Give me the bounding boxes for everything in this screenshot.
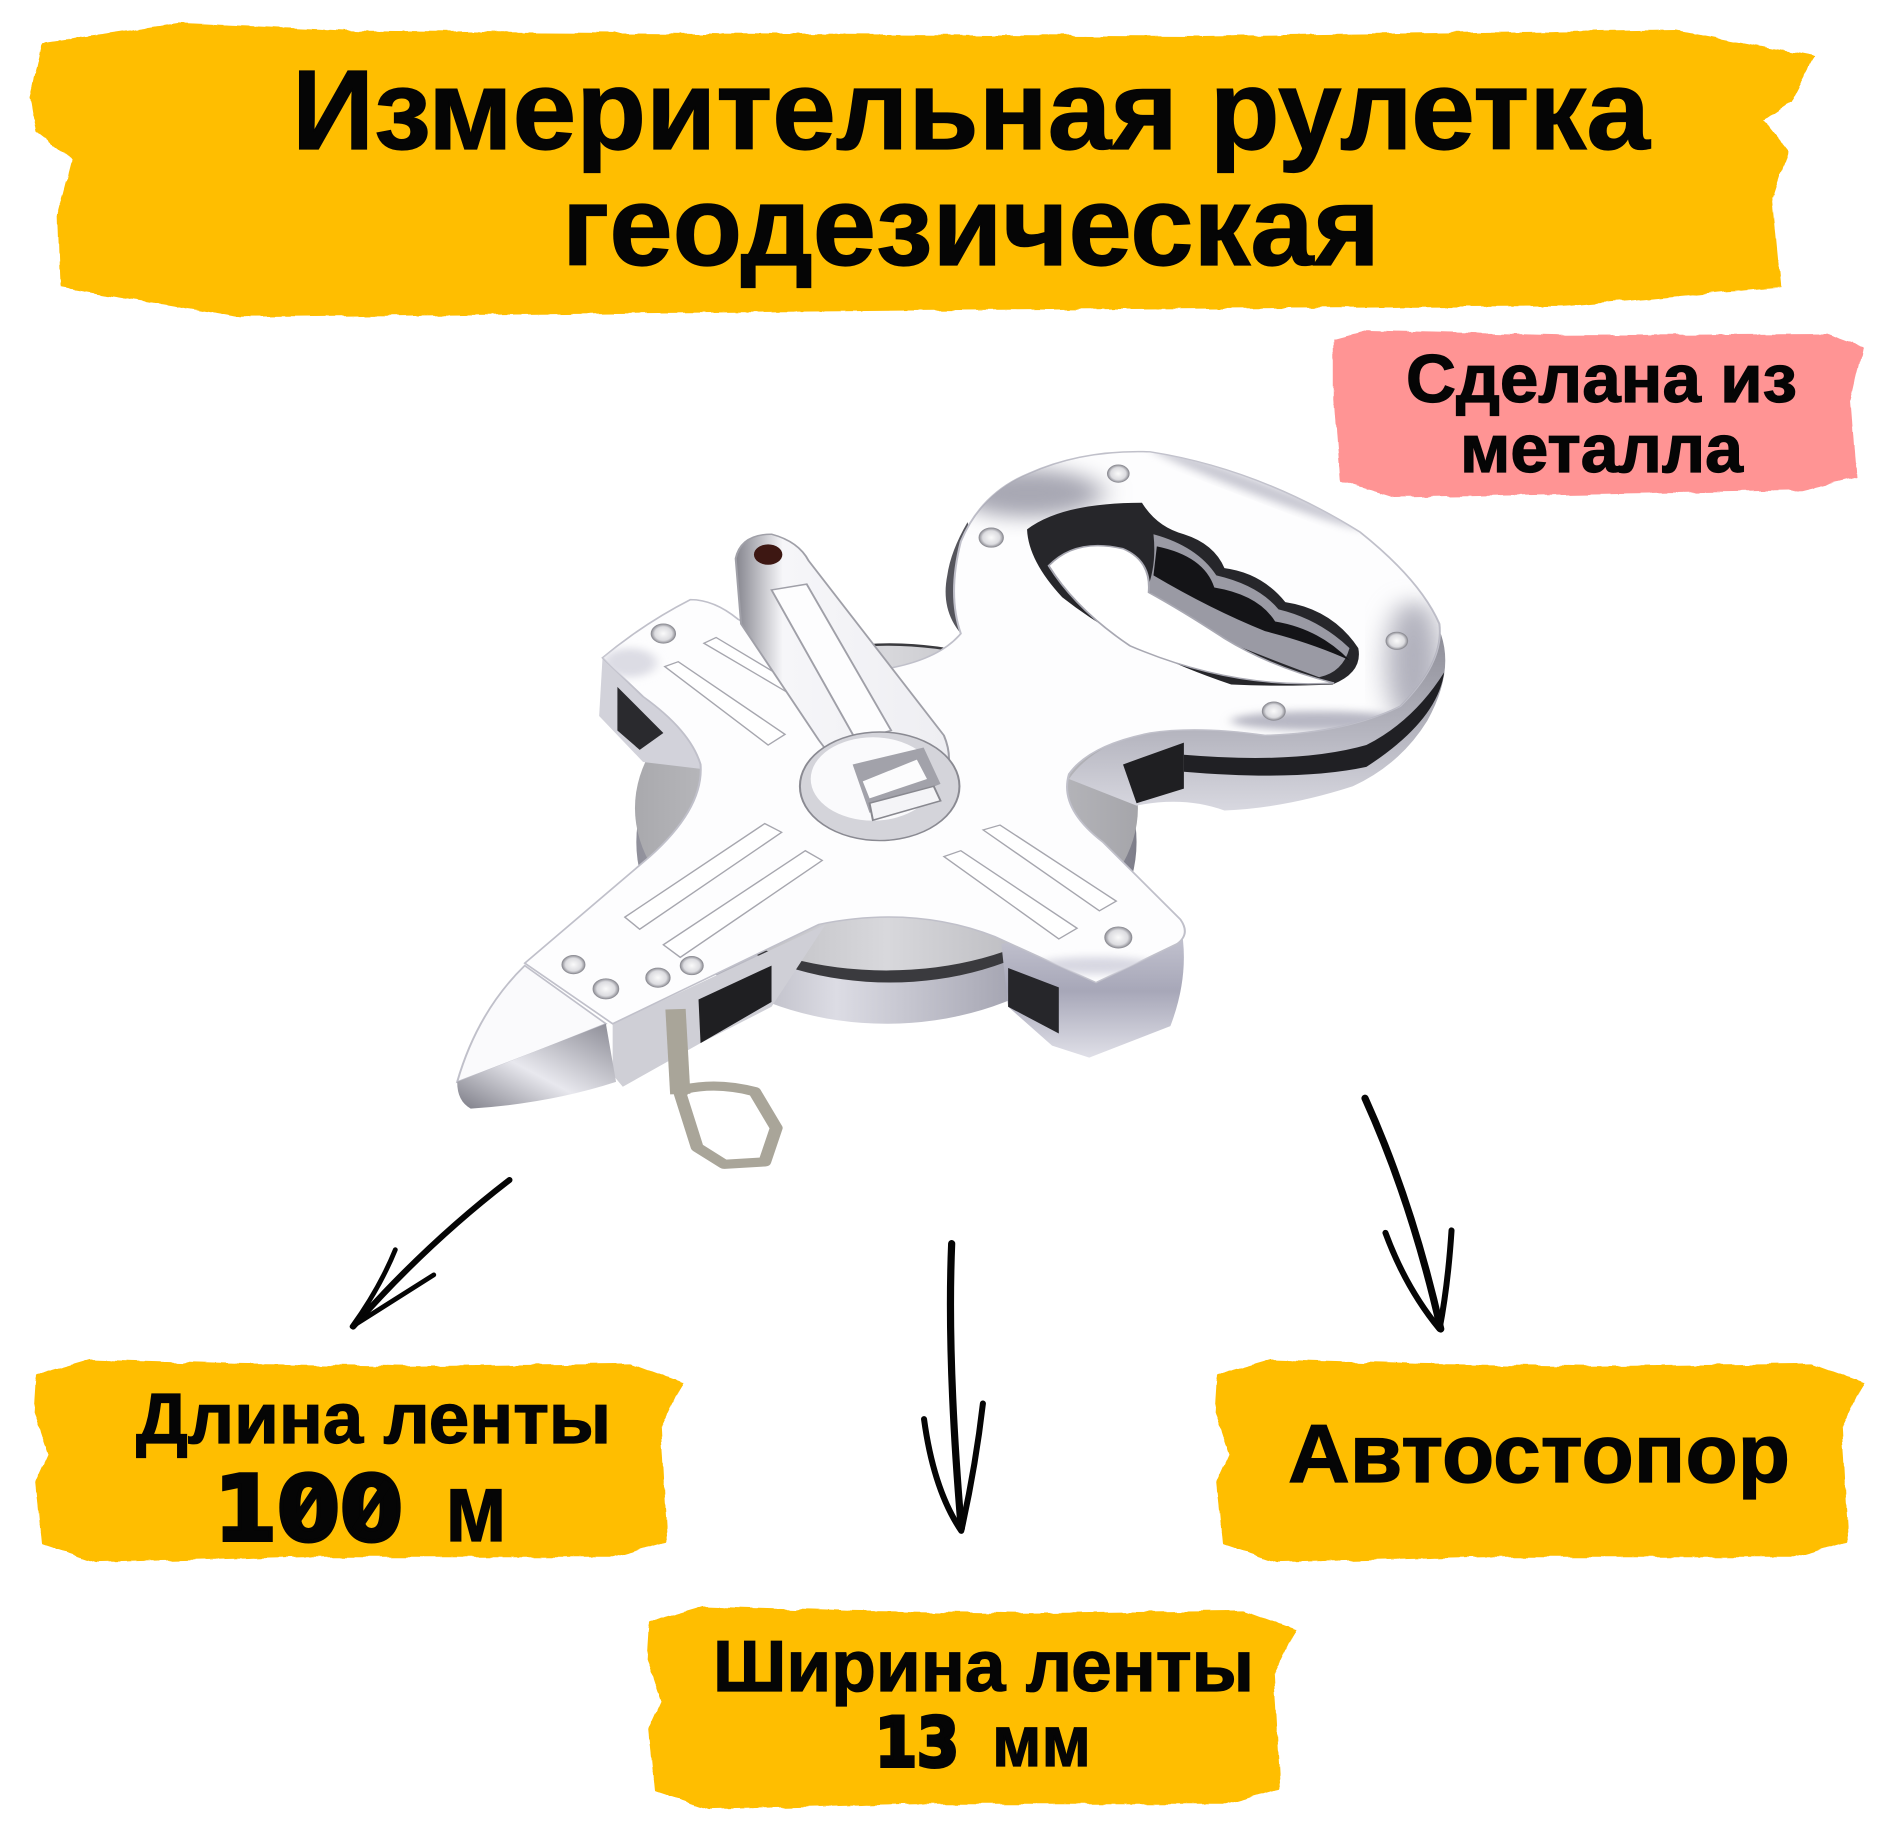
tape length value (214, 1453, 507, 1562)
callout text: Сделана из (1406, 341, 1797, 417)
top face (525, 452, 1440, 1024)
callout: metal (1334, 330, 1862, 497)
handle side band (1069, 634, 1445, 810)
grip dark groove (1153, 546, 1350, 660)
callout text: металла (1460, 411, 1744, 487)
reel face (635, 646, 1138, 970)
box: auto-stop (1215, 1359, 1864, 1562)
handle back side (946, 522, 981, 634)
crank arm (736, 534, 959, 841)
face grooves (625, 637, 1116, 957)
face shading (603, 441, 1441, 974)
box: tape width (647, 1606, 1296, 1809)
tape width value: мм (992, 1702, 1091, 1782)
grip highlight (1147, 534, 1350, 677)
crank hub (800, 732, 959, 841)
right slot (1008, 968, 1059, 1033)
title text (292, 47, 1651, 289)
title text: Измерительная рулетка (292, 47, 1651, 173)
handle dark stripe (1184, 672, 1444, 776)
arrow: to tape length (352, 1180, 509, 1327)
title text: геодезическая (562, 163, 1380, 289)
arrow: to tape width (924, 1244, 983, 1531)
tape width label: Ширина ленты (713, 1627, 1254, 1707)
right arm side (1001, 924, 1184, 1058)
arrow: to auto-stop (1365, 1098, 1452, 1329)
nose tip (457, 966, 616, 1109)
tape end hook (676, 1009, 776, 1164)
tape length label: Длина ленты (136, 1380, 611, 1459)
rivets (562, 465, 1408, 999)
top arm side (599, 658, 704, 769)
product: measuring reel tape (457, 441, 1445, 1164)
handle grip opening (1027, 503, 1359, 686)
callout text (1406, 341, 1797, 487)
auto-stop label: Автостопор (1288, 1407, 1790, 1500)
tape length value: м (445, 1453, 507, 1562)
grip hole (1049, 546, 1334, 684)
tape length value: 100 (214, 1457, 403, 1562)
tape width value: 13 (875, 1704, 959, 1783)
title banner (30, 23, 1814, 317)
reel side wall (636, 660, 1137, 1024)
left arm side (613, 924, 826, 1087)
top arm slot (617, 687, 663, 750)
reel dark rim (646, 643, 1133, 983)
box: tape length (34, 1359, 683, 1562)
tape width value (875, 1702, 1091, 1783)
left slot (699, 966, 772, 1043)
handle inner slot (1123, 743, 1184, 803)
